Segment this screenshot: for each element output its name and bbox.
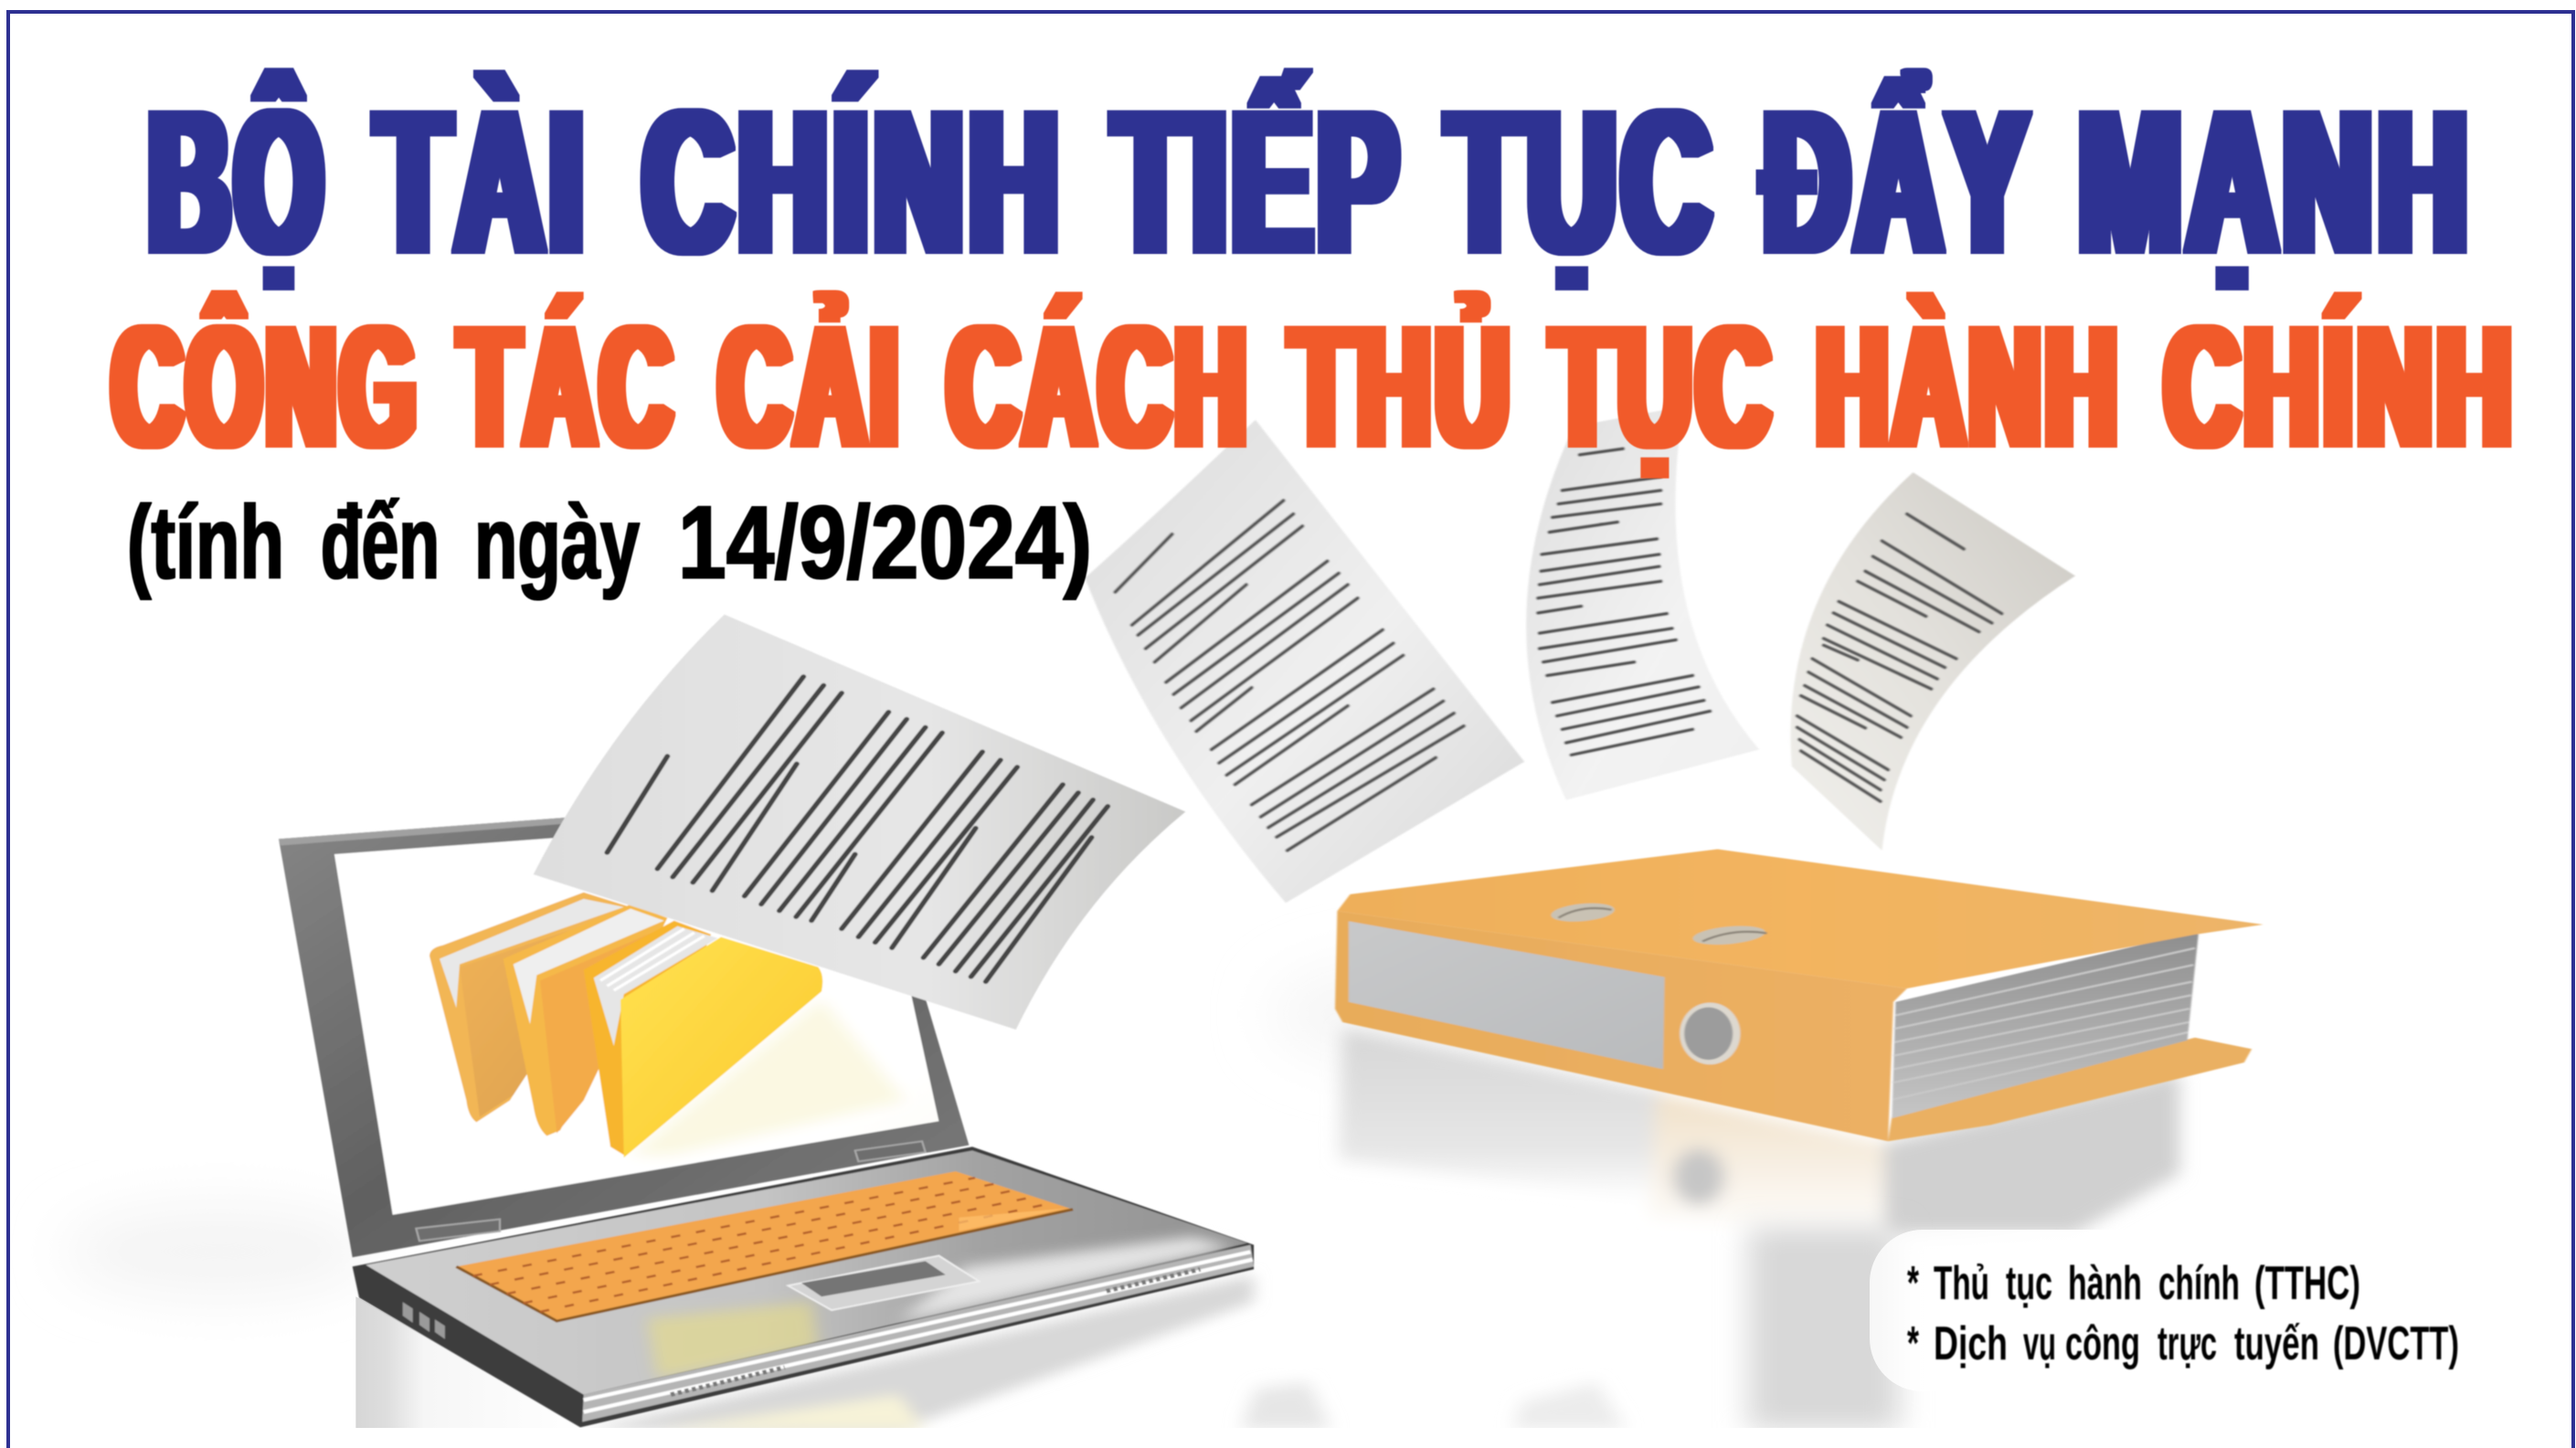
note line 2: tuyến [2234, 1317, 2319, 1370]
silver front trim [582, 1245, 1254, 1422]
bottom white strip [0, 1428, 2576, 1448]
folder 1 [429, 893, 631, 1122]
title line 1: TỤC [1447, 69, 1716, 296]
note line 1: chính [2158, 1257, 2240, 1310]
laptop base front edge [353, 1147, 1254, 1427]
side ports [403, 1302, 445, 1339]
lid top highlight [279, 796, 865, 845]
title line 1: TÀI [376, 69, 589, 296]
illustration: binder and papers [1085, 407, 2263, 1430]
subtitle date: ngày [474, 485, 640, 601]
deck bright patch [898, 1237, 1234, 1321]
illustration: laptop with folders [279, 615, 1254, 1430]
floating paper 2 [1085, 419, 1524, 903]
laptop deck [366, 1150, 1247, 1395]
title line 1: TIẾP [1114, 69, 1404, 296]
folder glow shadow [631, 999, 906, 1155]
title line 2: TỤC [1552, 291, 1775, 482]
binder label [1349, 921, 1665, 1069]
subtitle date: đến [321, 485, 440, 601]
laptop reflection [355, 1274, 1254, 1430]
subtitle date [127, 485, 1092, 601]
subtitle date: (tính [127, 485, 284, 601]
note line 1: tục [2006, 1257, 2052, 1310]
binder bottom cover [1888, 1038, 2252, 1141]
note box [1870, 1230, 2564, 1391]
floating paper 4 [1790, 472, 2075, 851]
touchpad [788, 1256, 979, 1310]
title line 1: ĐẨY [1764, 69, 2033, 296]
subtitle date: 14/9/2024) [678, 485, 1092, 601]
title line 1: CHÍNH [643, 69, 1065, 296]
title line 2 [112, 291, 2517, 482]
soft floor shadows [64, 959, 1581, 1297]
title line 2: CÔNG [112, 291, 420, 482]
binder pages [1892, 931, 2199, 1118]
binder spine [1335, 911, 1907, 1141]
note line 1 [1907, 1257, 2360, 1310]
binder ring hole [1680, 1002, 1740, 1064]
note line 2: trực [2157, 1317, 2217, 1370]
title line 1: BỘ [149, 69, 328, 296]
note line 1: Thủ [1934, 1257, 1989, 1310]
title line 2: THỦ [1290, 291, 1514, 482]
laptop screen [334, 815, 938, 1215]
laptop lid [279, 796, 969, 1257]
laptop hinges [416, 1141, 926, 1241]
note line 1: (TTHC) [2254, 1257, 2360, 1310]
floating paper 1 [534, 615, 1185, 1030]
note line 2 [1907, 1317, 2459, 1370]
title line 2: CẢI [719, 291, 903, 482]
note line 2: (DVCTT) [2333, 1317, 2459, 1370]
note line 2: vụ [2023, 1317, 2056, 1370]
note line 2: Dịch [1934, 1317, 2008, 1370]
floating paper 3 [1526, 407, 1759, 800]
lower floor reflections [1240, 1228, 1900, 1430]
title line 1 [149, 69, 2474, 296]
binder top rings [1550, 901, 1766, 947]
note line 2: công [2065, 1317, 2140, 1370]
keyboard [456, 1171, 1073, 1321]
folder 2 [504, 904, 667, 1136]
title line 2: TÁC [460, 291, 676, 482]
title line 2: CÁCH [948, 291, 1251, 482]
title line 2: HÀNH [1817, 291, 2122, 482]
note line 1: * [1907, 1257, 1919, 1310]
folder 3 yellow [584, 921, 822, 1157]
binder reflection [1339, 1029, 2179, 1241]
note line 1: hành [2068, 1257, 2142, 1310]
binder top cover [1337, 849, 2263, 988]
note line 2: * [1907, 1317, 1919, 1370]
deck yellow reflection [647, 1302, 818, 1379]
